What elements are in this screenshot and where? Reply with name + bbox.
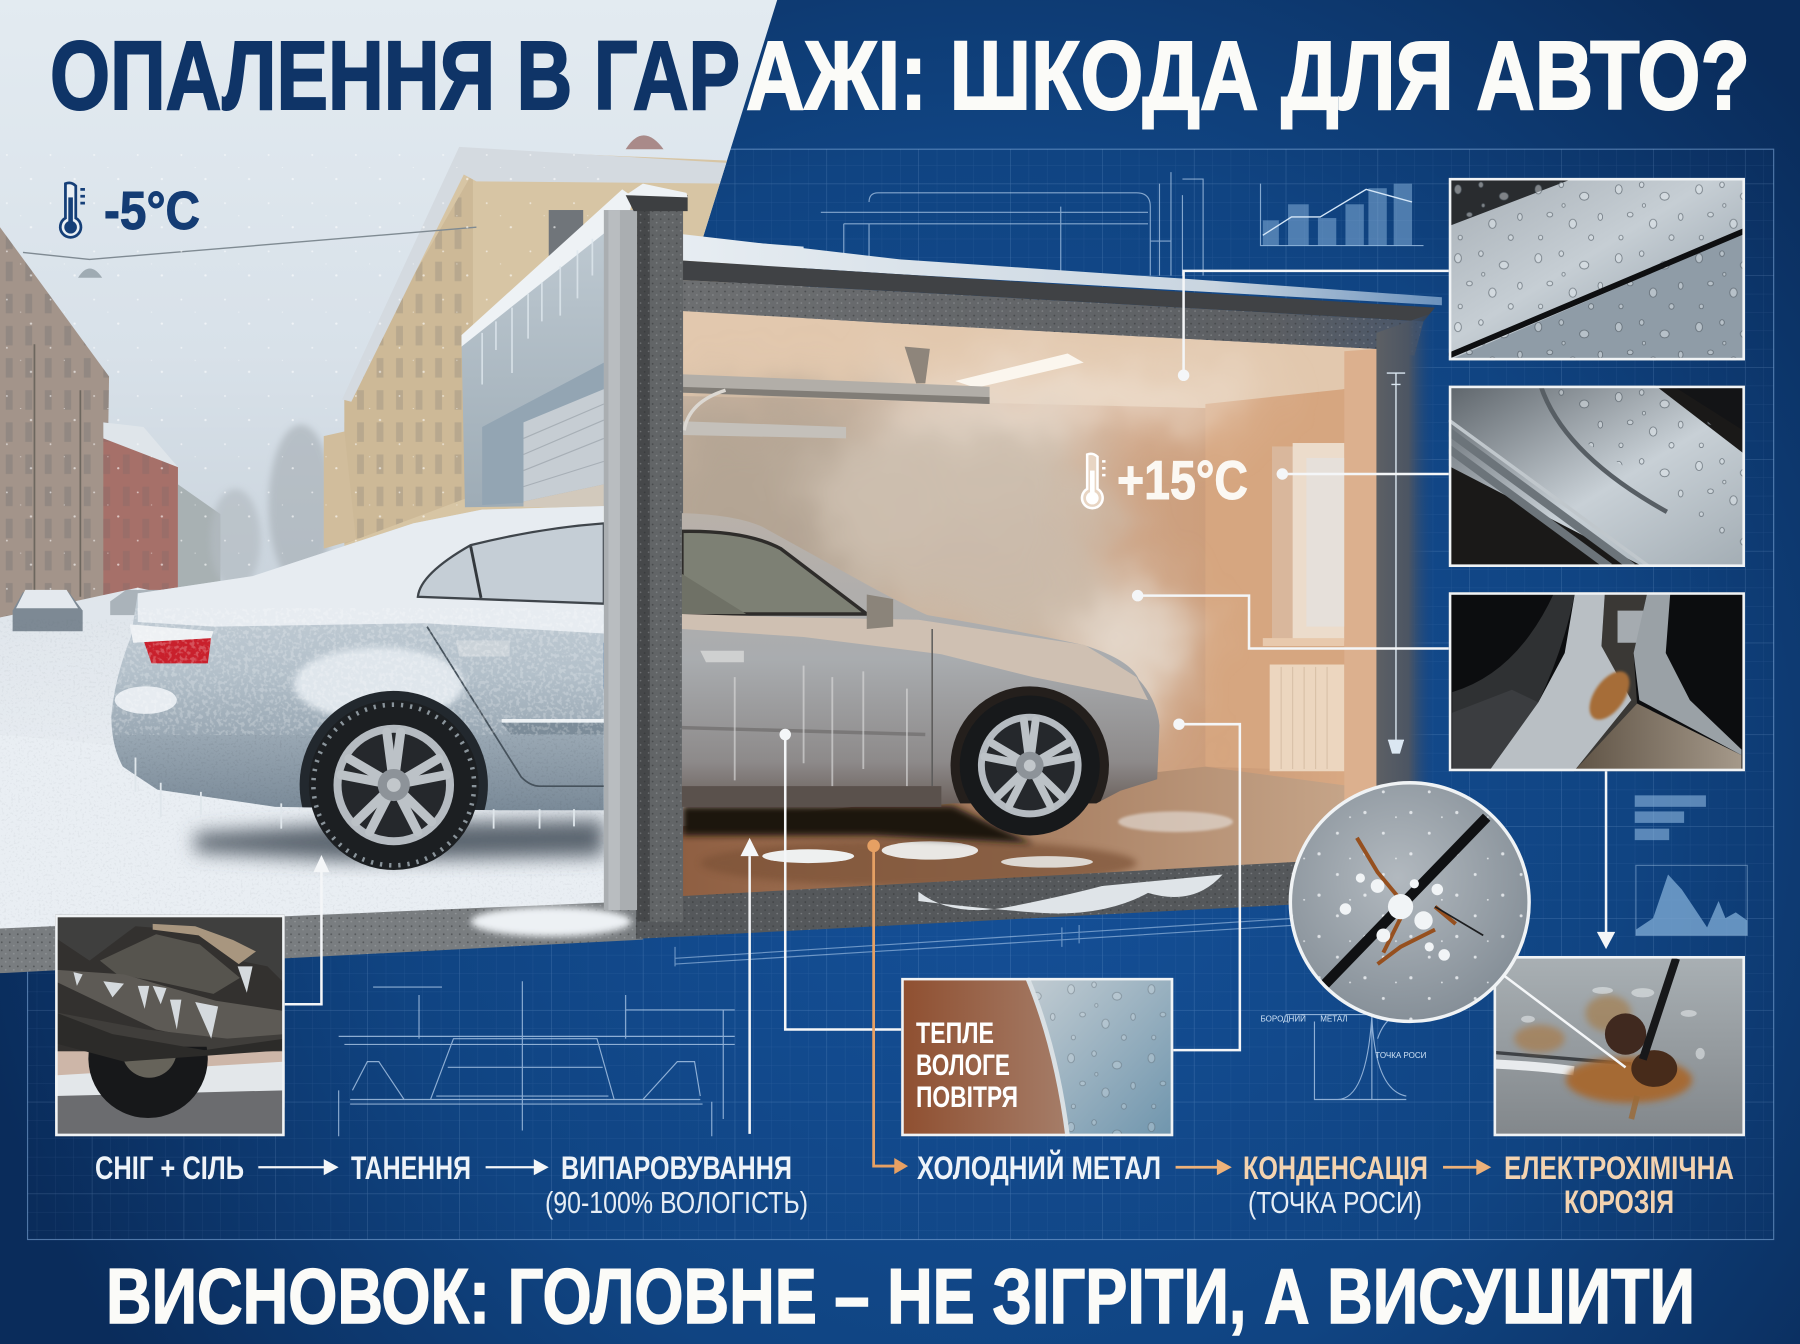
puddles and melt bbox=[700, 840, 1137, 886]
arrow: cold metal to condensation bbox=[1176, 1159, 1232, 1175]
garage exterior wall bbox=[461, 189, 634, 507]
arrow: condensation to corrosion bbox=[1443, 1159, 1491, 1175]
blueprint: dew point chart bbox=[1261, 1014, 1435, 1099]
inset label: warm moist air: ВОЛОГЕ bbox=[916, 1049, 1010, 1082]
leader: magnifier to rust bbox=[1504, 976, 1626, 1067]
ceiling bbox=[682, 311, 1376, 409]
garage structure: roof and walls bbox=[636, 234, 1442, 939]
inset label: warm moist air bbox=[916, 1017, 1018, 1114]
car: front wheel bbox=[960, 696, 1100, 836]
blueprint: chassis cross-section bottom left bbox=[339, 981, 735, 1136]
orange leader to cold metal bbox=[867, 840, 908, 1174]
outside temperature: -5°C bbox=[104, 181, 200, 241]
distant cars bbox=[13, 590, 172, 631]
flow step: electrochemical corrosion bbox=[1504, 1150, 1734, 1220]
ceiling light bbox=[905, 347, 1084, 388]
inset label: warm moist air: ПОВІТРЯ bbox=[916, 1081, 1018, 1114]
photo: wet sill bbox=[1448, 386, 1745, 567]
leader: ceiling to wet seam bbox=[1184, 271, 1449, 375]
door track bbox=[680, 374, 990, 438]
window bbox=[1263, 443, 1344, 646]
blueprint: bars and area chart right bbox=[1635, 795, 1747, 935]
leader lines and dots bbox=[285, 271, 1626, 1134]
blueprint: garage outline top bbox=[821, 172, 1203, 275]
falling snow bbox=[0, 138, 608, 597]
blueprint: bar and line chart top bbox=[1261, 184, 1424, 246]
photo scene: winter street bbox=[0, 0, 804, 976]
car: frosted rear half outside bbox=[111, 506, 604, 829]
thermometer: inside bbox=[1082, 454, 1106, 508]
side wall bbox=[1205, 389, 1344, 771]
car: rear wheel bbox=[309, 700, 479, 870]
car: warm front half inside bbox=[682, 513, 1160, 807]
leader: hood to warm air panel bbox=[1173, 724, 1240, 1050]
right wall return bbox=[1344, 349, 1376, 803]
blueprint: dew point chart: БОРОДНИЙ bbox=[1261, 1014, 1306, 1023]
blueprint: dew point chart: МЕТАЛ bbox=[1320, 1014, 1348, 1023]
leader: steam to jamb bbox=[1138, 596, 1449, 648]
right beige building bbox=[324, 135, 729, 551]
thermometer: outside bbox=[60, 183, 85, 237]
arrow: melting to evaporation bbox=[486, 1159, 549, 1175]
street snow bbox=[0, 588, 643, 932]
vertical dimension line bbox=[1387, 373, 1405, 753]
snow texture bbox=[1, 872, 601, 925]
photo: rust close-up bbox=[1494, 956, 1745, 1136]
arrow: snow to melting bbox=[258, 1159, 339, 1175]
flow step: condensation: КОНДЕНСАЦІЯ bbox=[1243, 1150, 1428, 1186]
flow step: electrochemical corrosion: ЕЛЕКТРОХІМІЧНА bbox=[1504, 1150, 1734, 1186]
flow step: electrochemical corrosion: КОРОЗІЯ bbox=[1564, 1184, 1674, 1220]
floor bbox=[683, 766, 1344, 896]
photo: underbody with icicles bbox=[55, 914, 285, 1136]
overhead wire and lamp bbox=[23, 227, 476, 278]
inset label: warm moist air: ТЕПЛЕ bbox=[916, 1017, 994, 1050]
flow arrows bbox=[258, 1159, 1491, 1175]
blueprint: dew point chart: ТОЧКА РОСИ bbox=[1375, 1051, 1427, 1060]
radiator bbox=[1270, 665, 1344, 771]
wet shadow under car bbox=[195, 819, 604, 861]
blueprint grid frame bbox=[28, 149, 1774, 1240]
title: dark part: ОПАЛЕННЯ В ГАР bbox=[50, 21, 740, 130]
inside temperature: +15°C bbox=[1117, 449, 1248, 511]
arrowheads bbox=[313, 838, 1615, 949]
flow step: snow and salt: СНІГ + СІЛЬ bbox=[95, 1150, 244, 1186]
photo: warm air against cold metal bbox=[901, 978, 1174, 1136]
leader: window to sill bbox=[1282, 473, 1449, 475]
left street buildings bbox=[0, 227, 333, 617]
cross-section pillars bbox=[604, 184, 688, 922]
leader dots bbox=[779, 370, 1288, 740]
garage interior room bbox=[643, 311, 1376, 907]
leader: door to warm air panel bbox=[785, 735, 901, 1029]
flow step: melting: ТАНЕННЯ bbox=[351, 1150, 471, 1186]
photo: wet door seam bbox=[1448, 178, 1745, 360]
flow note: dew point: (ТОЧКА РОСИ) bbox=[1248, 1185, 1422, 1220]
leader: steam rising bbox=[749, 856, 751, 1134]
magnifier: cracked paint and salt bbox=[1286, 780, 1538, 1033]
blueprint: slab dimension lines bbox=[675, 918, 1297, 966]
foreground snow bbox=[0, 735, 634, 928]
flow step: evaporation: ВИПАРОВУВАННЯ bbox=[561, 1150, 792, 1186]
flow step: cold metal: ХОЛОДНИЙ МЕТАЛ bbox=[917, 1150, 1161, 1186]
kerb foundation bbox=[0, 901, 643, 976]
leader: underbody to rear wheel bbox=[285, 870, 321, 1004]
leader: jamb to rust bbox=[1605, 771, 1607, 935]
photo: door jamb with rust bbox=[1448, 592, 1745, 772]
sky bbox=[0, 0, 804, 643]
flow note: humidity: (90-100% ВОЛОГІСТЬ) bbox=[545, 1185, 808, 1220]
steam cloud bbox=[643, 371, 1263, 728]
